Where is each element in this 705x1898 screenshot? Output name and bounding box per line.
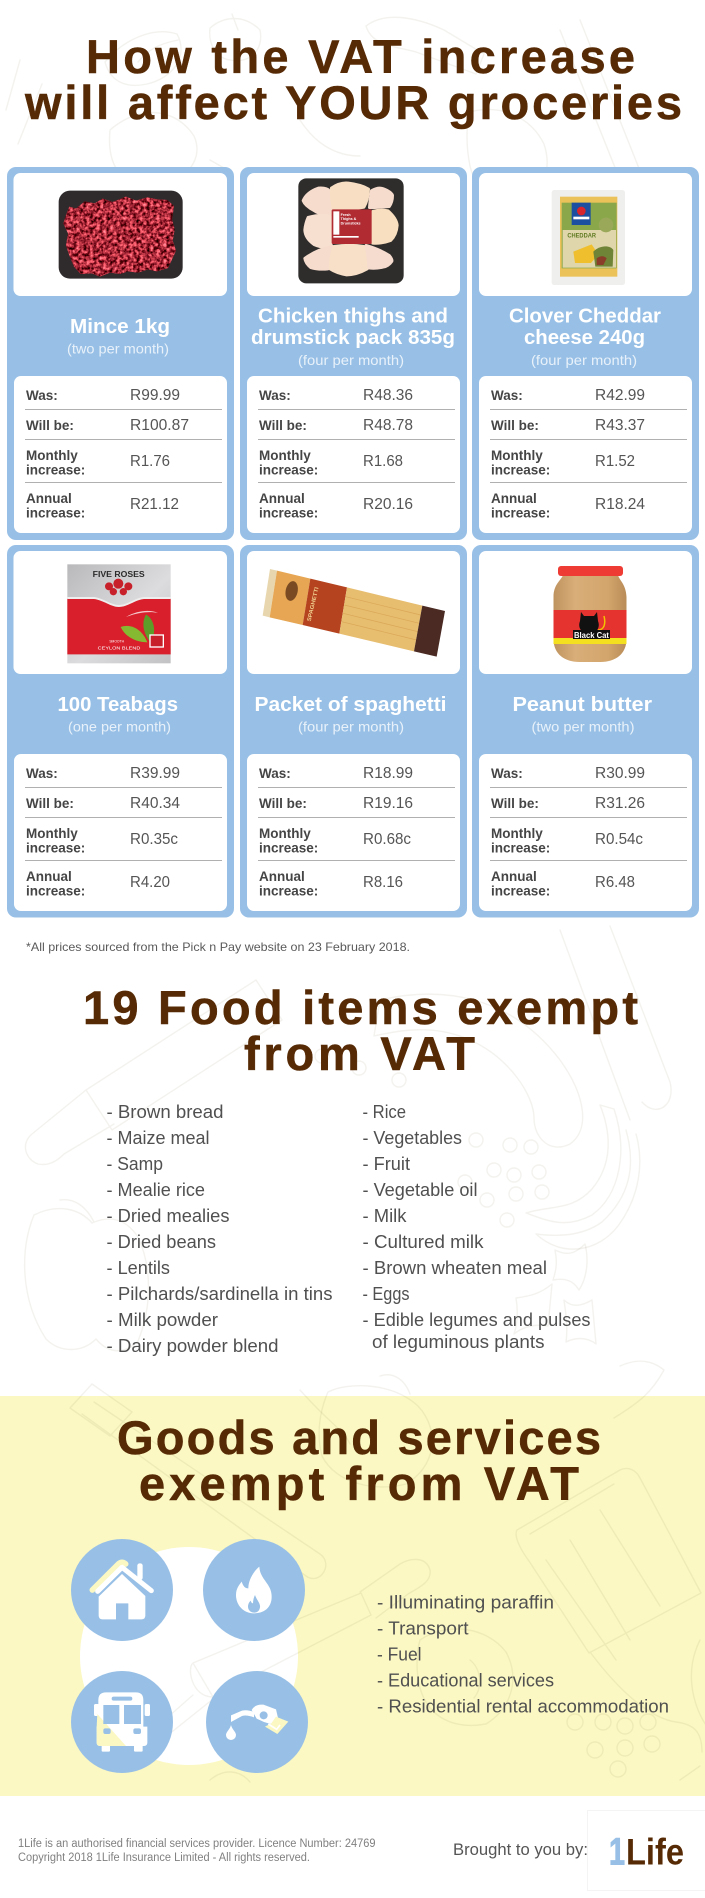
- list: exempt food items, right column: - Vegetable oil: [362, 1180, 478, 1200]
- list: exempt food items, left column: - Milk powder: [106, 1310, 218, 1330]
- price table: R99.99: [130, 387, 180, 404]
- item name: cheese 240g: [524, 327, 645, 349]
- image: cheddar pack: [552, 190, 625, 285]
- image: Five Roses tea box: CEYLON BLEND: [98, 645, 141, 651]
- panel: Clover Cheddar cheese 240g: [472, 167, 699, 540]
- price table: R100.87: [130, 417, 189, 434]
- item name: drumstick pack 835g: [251, 327, 455, 349]
- quantity: (one per month): [68, 718, 171, 734]
- list: exempt goods and services: - Fuel: [377, 1644, 422, 1664]
- heading: 19 Food items exempt from VAT: [83, 981, 638, 1080]
- icon: bus: [71, 1671, 173, 1773]
- price table: Will be:: [259, 418, 307, 433]
- price table: Was:: [259, 388, 291, 403]
- title: How the VAT increase will affect YOUR groceries: will affect YOUR groceries: [24, 76, 682, 129]
- price table: Was:: [26, 388, 58, 403]
- logo: 1Life: Life: [626, 1832, 684, 1872]
- price table: R1.68: [363, 453, 403, 470]
- panel: Mince 1kg: [7, 167, 234, 540]
- panel: Peanut butter: [472, 545, 699, 918]
- price table: R40.34: [130, 795, 180, 812]
- title: How the VAT increase will affect YOUR groceries: How the VAT increase: [86, 30, 635, 83]
- title: How the VAT increase will affect YOUR groceries: [24, 30, 682, 129]
- price table: R20.16: [363, 496, 413, 513]
- price table: Monthly: [26, 826, 78, 841]
- price table: R0.68c: [363, 831, 411, 848]
- price table: Will be:: [26, 796, 74, 811]
- price table: [247, 376, 460, 533]
- panel: 100 Teabags: [7, 545, 234, 918]
- price table: R6.48: [595, 874, 635, 891]
- footer: legal text: Copyright 2018 1Life Insurance Limited - All rights reserved.: [18, 1852, 310, 1864]
- price table: Monthly: [26, 448, 78, 463]
- price table: increase:: [491, 884, 550, 898]
- price table: increase:: [26, 840, 85, 856]
- price table: Will be:: [259, 796, 307, 811]
- item name: Chicken thighs and: [258, 306, 448, 328]
- heading: Goods and services exempt from VAT: Goods and services: [117, 1411, 601, 1464]
- list: exempt food items, left column: - Samp: [106, 1154, 163, 1174]
- price table: R30.99: [595, 765, 645, 782]
- item name: Peanut butter: [512, 694, 652, 716]
- label: chicken pack sticker: Drumsticks: [341, 221, 361, 225]
- price table: Was:: [491, 766, 523, 781]
- item name: Mince 1kg: [70, 316, 170, 338]
- list: exempt food items, left column: - Pilchards/sardinella in tins: [106, 1284, 332, 1304]
- price table: Was:: [491, 388, 523, 403]
- price table: R0.35c: [130, 831, 178, 848]
- list: exempt food items, right column: - Eggs: [362, 1284, 410, 1304]
- icon: house: [71, 1539, 173, 1641]
- quantity: (two per month): [67, 340, 169, 356]
- price table: [247, 754, 460, 911]
- image: mince tray: [59, 191, 183, 279]
- price table: increase:: [491, 506, 550, 520]
- quantity: (four per month): [298, 718, 404, 734]
- price table: Monthly: [491, 826, 543, 841]
- panel: Chicken thighs and drumstick pack 835g: [240, 167, 467, 540]
- image: chicken tray: [298, 178, 404, 283]
- price table: Annual: [26, 869, 72, 884]
- item name: [251, 306, 455, 349]
- price table: increase:: [259, 506, 318, 520]
- quantity: (four per month): [531, 352, 637, 368]
- white circle behind service icons: [80, 1547, 298, 1765]
- price table: Annual: [259, 491, 305, 506]
- price table: Monthly: [259, 826, 311, 841]
- list: exempt food items, right column: - Cultured milk: [362, 1232, 485, 1252]
- price table: R18.99: [363, 765, 413, 782]
- list: exempt food items, right column: - Brown wheaten meal: [362, 1258, 547, 1278]
- price table: increase:: [26, 884, 85, 898]
- price table: increase:: [259, 462, 318, 478]
- footnote: price source: *All prices sourced from the Pick n Pay website on 23 February 2018.: [26, 940, 410, 954]
- list: exempt food items, left column: - Dried mealies: [106, 1206, 230, 1226]
- price table: R39.99: [130, 765, 180, 782]
- list: exempt food items, left column: - Maize meal: [106, 1128, 210, 1148]
- image: Five Roses tea box: SMOOTH: [109, 638, 124, 643]
- list: exempt food items, right column: - Milk: [362, 1206, 408, 1226]
- label: chicken pack sticker: Thighs &: [341, 217, 357, 221]
- quantity: (four per month): [298, 352, 404, 368]
- list: exempt food items, left column: - Dairy powder blend: [106, 1336, 278, 1356]
- list: exempt food items, right column: - Edible legumes and pulses: [362, 1310, 590, 1330]
- item name: [509, 306, 661, 349]
- price table: increase:: [259, 840, 318, 856]
- price table: increase:: [259, 884, 318, 898]
- list: exempt food items, right column: [362, 1102, 590, 1352]
- heading: 19 Food items exempt from VAT: from VAT: [244, 1027, 475, 1080]
- icon: fuel nozzle: [206, 1671, 308, 1773]
- image: spaghetti packet: [263, 569, 445, 657]
- list: exempt food items, left column: - Mealie rice: [106, 1180, 205, 1200]
- list: exempt food items, left column: - Brown bread: [106, 1102, 224, 1122]
- image: cheddar pack: CHEDDAR: [567, 232, 596, 239]
- list: exempt food items, right column: - Rice: [362, 1102, 406, 1122]
- item name: Packet of spaghetti: [254, 694, 446, 716]
- price table: Annual: [259, 869, 305, 884]
- list: exempt goods and services: - Transport: [377, 1618, 468, 1638]
- price table: [479, 376, 692, 533]
- price table: R42.99: [595, 387, 645, 404]
- icon: flame: [203, 1539, 305, 1641]
- price table: Monthly: [259, 448, 311, 463]
- price table: increase:: [491, 462, 550, 478]
- footer: legal text: 1Life is an authorised financial services provider. Licence Number: 24769: [18, 1838, 376, 1850]
- image: Five Roses tea box: FIVE ROSES: [93, 570, 145, 579]
- price table: R48.36: [363, 387, 413, 404]
- price table: increase:: [491, 840, 550, 856]
- item name: 100 Teabags: [58, 694, 178, 716]
- price table: [479, 754, 692, 911]
- item name: Clover Cheddar: [509, 306, 661, 328]
- quantity: (two per month): [532, 718, 634, 734]
- price table: R18.24: [595, 496, 645, 513]
- price table: increase:: [26, 462, 85, 478]
- image: Five Roses tea box: [67, 564, 171, 663]
- price table: R43.37: [595, 417, 645, 434]
- price table: R48.78: [363, 417, 413, 434]
- price table: [14, 754, 227, 911]
- price table: Annual: [491, 869, 537, 884]
- footer: brought to you by: Brought to you by:: [453, 1840, 588, 1859]
- panel: Packet of spaghetti: [240, 545, 467, 918]
- price table: Will be:: [491, 796, 539, 811]
- price table: Will be:: [491, 418, 539, 433]
- price table: Will be:: [26, 418, 74, 433]
- footer: legal text: [18, 1838, 376, 1864]
- image: peanut butter jar: Black Cat: [574, 630, 609, 640]
- price table: R0.54c: [595, 831, 643, 848]
- heading: Goods and services exempt from VAT: [117, 1411, 601, 1510]
- heading: 19 Food items exempt from VAT: 19 Food items exempt: [83, 981, 638, 1034]
- list: exempt goods and services: [377, 1592, 669, 1716]
- price table: R8.16: [363, 874, 403, 891]
- label: chicken pack sticker: Fresh: [341, 213, 351, 217]
- price table: Was:: [26, 766, 58, 781]
- price table: Annual: [491, 491, 537, 506]
- label: chicken pack sticker: [332, 209, 372, 244]
- price table: Annual: [26, 491, 72, 506]
- logo: 1Life: [588, 1810, 705, 1890]
- price table: Was:: [259, 766, 291, 781]
- image: peanut butter jar: [554, 566, 626, 662]
- price table: R1.76: [130, 453, 170, 470]
- price table: Monthly: [491, 448, 543, 463]
- list: exempt food items, right column: of leguminous plants: [372, 1332, 544, 1352]
- price table: increase:: [26, 506, 85, 520]
- price table: [14, 376, 227, 533]
- panel background: yellow goods and services band: [0, 1396, 705, 1796]
- price table: R31.26: [595, 795, 645, 812]
- heading: Goods and services exempt from VAT: exempt from VAT: [139, 1457, 579, 1510]
- list: exempt goods and services: - Residential rental accommodation: [377, 1696, 669, 1716]
- list: exempt goods and services: - Illuminating paraffin: [377, 1592, 554, 1612]
- list: exempt food items, right column: - Vegetables: [362, 1128, 462, 1148]
- list: exempt food items, left column: [106, 1102, 332, 1356]
- price table: R19.16: [363, 795, 413, 812]
- price table: R1.52: [595, 453, 635, 470]
- list: exempt food items, left column: - Lentils: [106, 1258, 170, 1278]
- image: spaghetti packet: SPAGHETTI: [307, 586, 321, 622]
- price table: R4.20: [130, 874, 170, 891]
- logo: 1Life: 1: [609, 1832, 625, 1874]
- list: exempt food items, right column: - Fruit: [362, 1154, 410, 1174]
- price table: R21.12: [130, 496, 179, 513]
- list: exempt food items, left column: - Dried beans: [106, 1232, 216, 1252]
- list: exempt goods and services: - Educational services: [377, 1670, 554, 1690]
